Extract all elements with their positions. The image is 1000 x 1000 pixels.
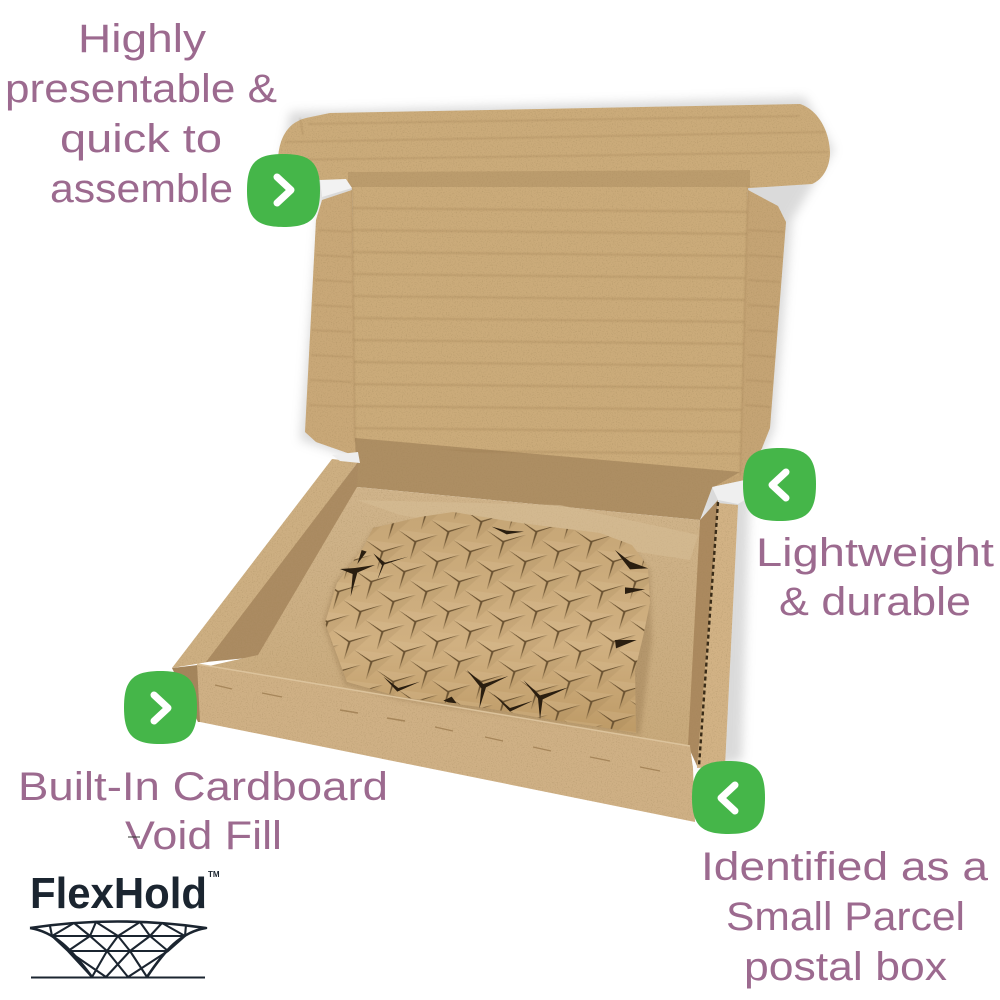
- text: highly presentable and quick to assemble: quick to: [60, 117, 222, 161]
- text: lightweight and durable: & durable: [779, 580, 971, 624]
- top flap fold shadow: [348, 170, 750, 187]
- sheet base: [325, 512, 650, 733]
- text: identified as a small parcel postal box: Identified as a: [701, 845, 989, 889]
- box floor: [200, 487, 700, 750]
- right wall corrugated edge: [699, 502, 718, 766]
- flap corrugation and fold lines: [280, 116, 828, 476]
- text: highly presentable and quick to assemble: Highly: [78, 17, 206, 61]
- drop shadow behind box: [280, 97, 834, 770]
- text: built-in cardboard void fill: [18, 765, 388, 858]
- right wall outer: [697, 503, 738, 768]
- logo wordmark: FlexHold: [30, 869, 207, 918]
- lid right side flap: [712, 190, 786, 487]
- left corner tab: [172, 665, 208, 722]
- text: highly presentable and quick to assemble: presentable &: [5, 67, 277, 111]
- button: lightweight: [743, 448, 816, 521]
- text: identified as a small parcel postal box: Small Parcel: [726, 895, 965, 939]
- Y cut pattern: [320, 505, 655, 740]
- lower lid panel band: [355, 438, 740, 520]
- sheet shadow: [323, 515, 652, 735]
- button: presentable: [247, 154, 320, 227]
- trademark mark: TM: [208, 870, 220, 879]
- FlexHold logo: [30, 869, 220, 978]
- front wall tab slits: [215, 685, 660, 771]
- top tuck flap: [278, 104, 830, 188]
- ragged paper underlay: [357, 500, 698, 560]
- right wall inner: [688, 500, 718, 768]
- left wall outer strip: [172, 459, 358, 668]
- logo baseline: [31, 976, 205, 978]
- lid left side flap: [305, 190, 356, 456]
- text: lightweight and durable: Lightweight: [756, 531, 994, 575]
- left wall inner face: [206, 462, 358, 662]
- cardboard box photo: [172, 104, 830, 822]
- front wall: [197, 664, 695, 822]
- text: highly presentable and quick to assemble: [5, 17, 277, 211]
- button: small parcel: [692, 761, 765, 834]
- text: built-in cardboard void fill: Void Fill: [125, 814, 282, 858]
- text: identified as a small parcel postal box: [701, 845, 989, 989]
- deep dark cuts: [340, 527, 648, 719]
- slits at hinge corners: [320, 179, 352, 197]
- text: built-in cardboard void fill: Built-In Cardboard: [18, 765, 388, 809]
- lid main panel: [352, 186, 748, 476]
- logo lattice arch: [30, 922, 206, 977]
- text: identified as a small parcel postal box: postal box: [744, 945, 947, 989]
- corrugation lines on lid: [345, 208, 755, 454]
- text: highly presentable and quick to assemble: assemble: [50, 167, 233, 211]
- FlexHold void fill sheet: [320, 500, 698, 740]
- button: void fill: [124, 671, 197, 744]
- text: lightweight and durable: [756, 531, 994, 624]
- front wall top highlight: [197, 664, 690, 746]
